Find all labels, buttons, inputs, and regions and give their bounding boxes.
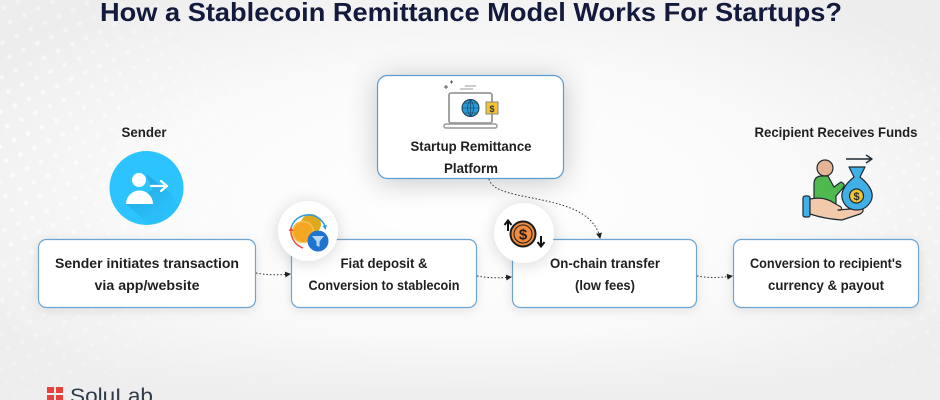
panel: on-chain step [512,240,696,308]
icon: coin conversion [278,201,338,261]
icon: on-chain coin: $ [519,226,528,244]
arrow: on-chain to payout [697,276,732,278]
icon: recipient with money bag [803,155,872,220]
heading: recipient: Recipient Receives Funds [754,125,918,140]
arrow: sender to fiat [256,273,290,275]
panel: payout step: currency & payout [768,278,884,293]
panel: on-chain step: On-chain transfer [550,256,661,271]
panel: payout step [734,240,918,308]
panel: payout step: Conversion to recipient's [750,256,902,271]
panel: on-chain step: (low fees) [575,278,635,293]
panel: platform [378,76,564,178]
heading: sender: Sender [122,125,167,140]
icon: on-chain coin [494,203,554,263]
icon: laptop with globe [444,80,498,128]
label: platform [410,139,532,176]
arrow: fiat to on-chain [477,276,511,278]
icon: laptop with globe: $ [489,104,495,114]
panel: sender step: via app/website [94,278,200,293]
panel: fiat deposit step: Fiat deposit & [340,256,428,271]
panel: fiat deposit step [292,240,476,308]
panel: sender step: Sender initiates transaction [55,256,239,271]
panel: sender step [38,240,256,308]
label: platform: Startup Remittance [410,139,532,154]
panel: fiat deposit step: Conversion to stablecoin [308,278,460,293]
icon: sender [110,151,190,225]
arrow: platform to on-chain [489,179,600,238]
icon: recipient with money bag: $ [853,191,860,203]
label: platform: Platform [444,161,498,176]
